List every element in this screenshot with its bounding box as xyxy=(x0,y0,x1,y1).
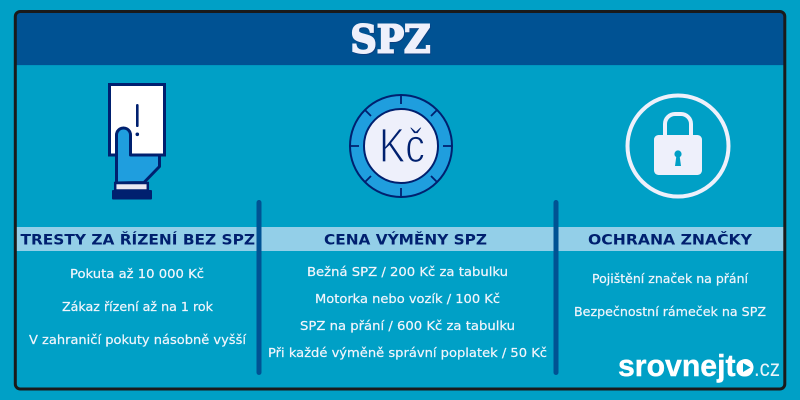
icon: Kč coin xyxy=(350,95,452,197)
text: abroad: V zahraničí pokuty násobně vyšší xyxy=(29,332,247,347)
divider right xyxy=(554,200,558,375)
column 1: penalties xyxy=(20,232,255,347)
logo: .cz xyxy=(754,355,780,381)
icon: hand holding penalty card xyxy=(110,84,164,200)
title: SPZ xyxy=(351,17,431,62)
text: regular plate: Bežná SPZ / 200 Kč za tabulku xyxy=(307,264,508,279)
header band xyxy=(16,12,785,66)
logo: srovnejto xyxy=(618,348,754,383)
heading: penalties: TRESTY ZA ŘÍZENÍ BEZ SPZ xyxy=(20,232,255,248)
icon: padlock xyxy=(628,96,728,196)
text: fine: Pokuta až 10 000 Kč xyxy=(70,266,204,281)
text: driving ban: Zákaz řízení až na 1 rok xyxy=(62,299,214,314)
section heading band xyxy=(16,227,784,251)
heading: protection: OCHRANA ZNAČKY xyxy=(588,230,753,248)
column 2: replacement price xyxy=(268,230,547,360)
text: security frame: Bezpečnostní rámeček na SPZ xyxy=(574,304,766,319)
text: admin fee: Při každé výměně správní poplatek / 50 Kč xyxy=(268,345,547,360)
text: custom plate: SPZ na přání / 600 Kč za tabulku xyxy=(300,318,515,333)
icon: Kč coin: Kč xyxy=(379,120,425,173)
divider left xyxy=(256,200,262,375)
text: motorcycle or trailer: Motorka nebo vozík / 100 Kč xyxy=(315,291,500,306)
column 3: plate protection xyxy=(574,230,766,319)
title: SPZ xyxy=(350,16,430,62)
heading: price: CENA VÝMĚNY SPZ xyxy=(324,230,487,248)
text: insurance: Pojištění značek na přání xyxy=(592,271,749,286)
